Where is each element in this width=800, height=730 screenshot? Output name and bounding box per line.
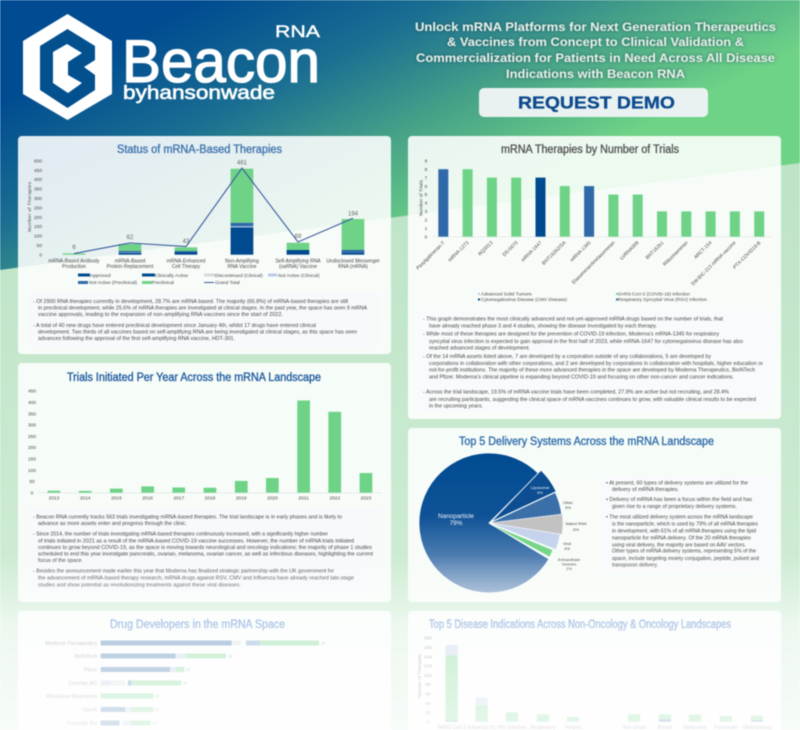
pie chart: delivery systems: Vesicles — [562, 562, 576, 566]
text block: status notes: vaccine approvals, leading to the expansion of non-amplifying RNA vaccines since the start of 2022. — [38, 312, 283, 318]
panel: status of mRNA-based therapies — [18, 136, 391, 354]
header tagline: Commercialization for Patients in Need Across All Disease — [416, 51, 775, 65]
stacked bar chart with total line: (saRNA) Vaccine — [279, 264, 317, 270]
legend: status chart: Clinically Active — [155, 273, 188, 279]
request demo button: REQUEST DEMO — [518, 92, 675, 112]
bar chart: therapies by trials: 5 — [425, 192, 428, 198]
bar chart: therapies by trials: 9 — [425, 158, 428, 164]
stacked bar chart: disease indications: 0 — [427, 719, 430, 725]
stacked bar chart with total line: 0 — [39, 252, 42, 258]
bar chart: therapies by trials: ARCT-154 — [693, 240, 714, 261]
heading: therapies by trials: mRNA Therapies by Number of Trials — [501, 144, 679, 156]
bar chart: therapies by trials: PTX-COVID19-B — [732, 240, 762, 271]
text block: therapies notes: - While most of these therapies are designed for the prevention of COVID-19 infection, Moderna’s mRNA-1345 for respiratory — [423, 332, 719, 338]
stacked bar chart: drug developers: Sanofi — [82, 708, 97, 714]
bar chart: trials per year: 2018 — [205, 496, 216, 502]
stacked bar chart with total line: 43 — [183, 239, 190, 245]
legend: status chart: Preclinical — [152, 280, 174, 286]
stacked bar chart: disease indications: 160 — [424, 645, 432, 651]
text block: therapies notes: - This graph demonstrates the most clinically advanced and not-yet-approved mRNA drugs based on the number of trials, that — [423, 316, 724, 322]
legend: status chart: Grand Total — [215, 280, 240, 286]
text block: therapies notes: reached advanced stages of development. — [429, 346, 530, 352]
background: light diagonal lower area — [0, 163, 800, 730]
stacked bar chart with total line: 300 — [34, 196, 42, 202]
panel: trials initiated per year — [18, 363, 391, 602]
stacked bar chart with total line: Protein Replacement — [107, 264, 154, 270]
pie chart: delivery systems: Naked RNA — [565, 521, 587, 526]
bar chart: therapies by trials: LVRNA009 — [619, 240, 641, 261]
pie chart: delivery systems: 5% — [565, 505, 571, 510]
bar chart: trials per year: 0 — [31, 490, 34, 496]
bar chart: therapies by trials: mRNA-1345 — [569, 240, 593, 263]
pie chart: delivery systems: Nanoparticle — [438, 513, 474, 520]
bar chart: therapies by trials: 8 — [425, 167, 428, 173]
stacked bar chart with total line: 350 — [34, 187, 42, 193]
text block: delivery notes: • The most utilized delivery system across the mRNA landscape — [606, 515, 753, 521]
heading: disease indications: Top 5 Disease Indications Across Non-Oncology & Oncology Landscapes — [429, 619, 731, 631]
legend: indications — [478, 292, 707, 303]
stacked bar chart: disease indications: 40 — [425, 701, 431, 707]
bar chart: therapies by trials: BNT162b1 — [645, 240, 666, 261]
text block: trials notes: continues to grow beyond COVID-19, as the space is moving towards neurological and oncology indications; the majority of phase 1 studies — [38, 545, 372, 551]
text block: delivery notes: using viral delivery, the majority are based on AAV vectors. — [612, 543, 746, 549]
bar chart: trials per year: 2019 — [236, 496, 247, 502]
text block: therapies notes: have already reached phase 3 and 4 studies, showing the disease investigated by each therapy. — [429, 324, 657, 330]
bar chart: trials per year: 350 — [28, 411, 36, 417]
header tagline: & Vaccines from Concept to Clinical Validation & — [447, 35, 744, 49]
stacked bar chart: drug developers: 76 — [321, 642, 325, 646]
pie chart: delivery systems: 79% — [450, 520, 463, 527]
text block: delivery notes — [601, 475, 772, 573]
bar chart: therapies by trials: DS-5670 — [502, 240, 520, 258]
heading: delivery systems: Top 5 Delivery Systems Across the mRNA Landscape — [459, 436, 714, 448]
bar chart: trials per year: 2014 — [80, 496, 91, 502]
stacked bar chart with total line: RNA (mRNA) — [338, 264, 368, 270]
bar chart: trials per year: 400 — [28, 400, 36, 406]
heading: status: Status of mRNA-Based Therapies — [117, 144, 282, 156]
stacked bar chart with total line: Number of Therapies — [27, 181, 32, 232]
stacked bar chart with total line: 68 — [295, 234, 302, 240]
text block: trials notes: the advancement of mRNA-based therapy research, mRNA drugs against RSV, CMV and Influenza have already reached late-stage — [38, 576, 354, 582]
stacked bar chart: drug developers: 45 — [228, 654, 232, 658]
stacked bar chart with total line: mRNA-Based Antibody — [48, 258, 100, 264]
panel: drug developers — [18, 611, 391, 730]
bar chart: therapies by trials: Elasomeran/imelasomeran — [571, 240, 617, 286]
stacked bar chart with total line: Non-Amplifying — [225, 258, 259, 264]
text block: therapies notes: syncytial virus infection is expected to gain approval in the first half of 2023, while mRNA-1647 for cytomegalovirus disease has also — [429, 339, 743, 345]
pie chart: delivery systems: Liposomal — [531, 485, 549, 490]
bar chart: trials per year: 2021 — [298, 496, 309, 502]
logo: Beacon RNA by Hanson Wade — [23, 14, 321, 120]
text block: therapies notes: - Of the 14 mRNA assets listed above, 7 are developed by a corporation outside of any collaborations, 5 are developed by — [423, 354, 711, 360]
text block: trials notes: scheduled to end this year investigate pancreatic, ovarian, melanoma, ovarian cancer, as well as infectious diseases, highlighting the current — [38, 552, 374, 558]
bar chart: therapies by trials: Riltozinameran — [662, 240, 690, 267]
bar chart: trials per year: 250 — [28, 434, 36, 440]
text block: delivery notes: • Delivery of mRNA has been a focus within the field and has — [606, 497, 752, 503]
text block: trials notes: - Beacon RNA currently tracks 563 trials investigating mRNA-based therapies. The trial landscape is in early phases and is likely to — [33, 514, 342, 520]
bar chart: trials per year: 450 — [28, 389, 36, 395]
stacked bar chart with total line: 62 — [127, 235, 134, 241]
text block: trials notes: - Besides the announcement made earlier this year that Moderna has finalized strategic partnership with the UK government for — [33, 569, 334, 575]
stacked bar chart with total line: 50 — [37, 243, 42, 249]
panel: top 5 disease indications — [408, 611, 781, 730]
pie chart: delivery systems: Other — [563, 500, 574, 505]
pie chart: delivery systems — [419, 453, 587, 593]
stacked bar chart: drug developers — [45, 640, 325, 727]
stacked bar chart with total line: 100 — [34, 234, 42, 240]
text block: delivery notes: nanoparticle for mRNA delivery. Of the 20 mRNA therapies — [612, 535, 751, 541]
stacked bar chart: disease indications — [417, 636, 772, 730]
stacked bar chart with total line: 400 — [34, 177, 42, 183]
text block: therapies notes — [417, 310, 771, 413]
stacked bar chart with total line — [27, 158, 380, 270]
pie chart: delivery systems: Viral — [563, 541, 571, 546]
text block: trials notes: - Since 2014, the number of trials investigating mRNA-based therapies continuously increased, with a significantly higher number — [33, 532, 328, 538]
logo: Beacon RNA by Hanson Wade: Beacon — [122, 28, 320, 95]
bar chart: trials per year: 2023 — [361, 496, 372, 502]
bar chart: therapies by trials: 7 — [425, 175, 428, 181]
pie chart: delivery systems: 4% — [564, 546, 570, 551]
legend: status chart: Not Active (Clinical) — [278, 273, 320, 279]
stacked bar chart: disease indications: 20 — [425, 710, 431, 716]
stacked bar chart: disease indications: 180 — [424, 636, 432, 642]
text block: status notes: in preclinical development, while 25.6% of mRNA therapies are investigated at clinical stages. In the past year, the space has seen 9 mRNA — [38, 306, 368, 312]
bar chart: trials per year: 150 — [28, 456, 36, 462]
text block: trials notes: of trials initiated in 2021 as a result of the mRNA-based COVID-19 vaccine successes. However, the number of mRNA trials initiated — [38, 538, 354, 544]
bar chart: therapies by trials: Number of Trials — [418, 179, 424, 216]
bar chart: trials per year — [28, 389, 382, 502]
stacked bar chart: disease indications: Number of Therapies — [417, 653, 423, 698]
stacked bar chart with total line: Cell Therapy — [172, 264, 201, 270]
bar chart: therapies by trials: SW-BIC-213 mRNA vaccine — [690, 240, 738, 287]
stacked bar chart: drug developers: BioNTech — [75, 654, 97, 660]
legend: status chart: Not Active (Preclinical) — [89, 280, 137, 286]
legend: status chart: Discontinued (Clinical) — [215, 273, 263, 279]
stacked bar chart with total line: 194 — [348, 212, 359, 218]
stacked bar chart with total line: Self-Amplifying RNA — [275, 258, 321, 264]
pie chart: delivery systems: 5% — [573, 527, 579, 532]
legend: indications: Advanced Solid Tumors — [481, 292, 532, 298]
stacked bar chart: drug developers: 35 — [186, 668, 190, 672]
text block: therapies notes: not-for-profit institutions. The majority of these more advanced therapies in the space are developed by Moderna Therapeutics, BioNTech — [429, 368, 755, 374]
heading: drug developers: Drug Developers in the mRNA Space — [110, 619, 285, 631]
text block: delivery notes: • At present, 60 types of delivery systems are utilized for the — [606, 481, 748, 487]
stacked bar chart: drug developers: Pfizer — [84, 668, 97, 674]
text block: therapies notes: - Across the trial landscape, 19.5% of mRNA vaccine trials have been completed, 27.9% are active but not recruiting, and 28.4% — [423, 390, 729, 396]
text block: delivery notes: delivery of mRNA therapies. — [612, 487, 679, 493]
stacked bar chart: drug developers: 19 — [152, 722, 156, 726]
panel: mRNA therapies by number of trials — [408, 136, 781, 419]
text block: therapies notes: and Pfizer. Moderna’s clinical pipeline is expanding beyond COVID-19 and focusing on other non-cancer and cancer indications. — [429, 374, 734, 380]
bar chart: trials per year: 2017 — [173, 496, 184, 502]
stacked bar chart: drug developers: Translate Bio — [67, 721, 97, 727]
text block: trials notes — [27, 508, 381, 593]
stacked bar chart with total line: mRNA-Based — [115, 258, 145, 264]
stacked bar chart: disease indications: 80 — [425, 682, 431, 688]
pie chart: delivery systems: 6% — [537, 490, 543, 495]
stacked bar chart with total line: 200 — [34, 215, 42, 221]
text block: status notes: development. Two thirds of all vaccines based on self-amplifying RNA are being investigated at clinical stages, as this space has seen — [38, 330, 357, 336]
text block: status notes: advances following the approval of the first self-amplifying RNA vaccine, HDT-301. — [38, 336, 235, 342]
text block: delivery notes: in development, with 61% of all mRNA therapies using the lipid — [612, 529, 756, 535]
bar chart: trials per year: 200 — [28, 445, 36, 451]
legend: indications: SARS-CoV-2 (COVID-19) Infection — [618, 292, 690, 298]
stacked bar chart with total line: RNA Vaccine — [227, 264, 257, 270]
legend: indications: Respiratory Syncytial Virus (RSV) Infection — [618, 297, 707, 303]
text block: status notes: - A total of 40 new drugs have entered preclinical development since January 4th, whilst 17 drugs have entered clinical — [33, 323, 316, 329]
text block: status notes — [27, 292, 381, 347]
stacked bar chart with total line: 6 — [72, 245, 76, 251]
stacked bar chart: disease indications: 60 — [425, 692, 431, 698]
bar chart: trials per year: 100 — [28, 468, 36, 474]
stacked bar chart with total line: 500 — [34, 158, 42, 164]
text block: delivery notes: given rise to a range of proprietary delivery systems. — [612, 504, 737, 510]
bar chart: therapies by trials — [415, 158, 772, 287]
bar chart: trials per year: 50 — [29, 479, 35, 485]
bar chart: therapies by trials: 0 — [425, 234, 428, 240]
stacked bar chart: drug developers: 30 — [183, 682, 187, 686]
stacked bar chart: drug developers: WestGene Biopharma — [46, 694, 97, 700]
header tagline — [415, 20, 776, 81]
stacked bar chart: drug developers: Moderna Therapeutics — [45, 641, 97, 647]
pie chart: delivery systems: Extracellular — [558, 557, 581, 562]
legend: status chart — [78, 273, 320, 286]
stacked bar chart with total line: 250 — [34, 205, 42, 211]
stacked bar chart: drug developers: CureVac AG — [69, 681, 97, 687]
stacked bar chart: disease indications: 120 — [424, 664, 432, 670]
text block: therapies notes: corporations in collaboration with other corporations, and 2 are developed by corporations in collaboration with hospitals, higher education or — [429, 361, 763, 367]
stacked bar chart with total line: 150 — [34, 224, 42, 230]
stacked bar chart with total line: Undisclosed Messenger — [326, 258, 380, 264]
stacked bar chart: drug developers: 20 — [155, 708, 159, 712]
bar chart: therapies by trials: 1 — [425, 226, 428, 232]
panel: top 5 delivery systems — [408, 428, 781, 602]
heading: trials: Trials Initiated Per Year Across the mRNA Landscape — [67, 372, 321, 384]
text block: therapies notes: in the upcoming years. — [429, 404, 483, 410]
bar chart: therapies by trials: mRNA-1647 — [520, 240, 544, 263]
text block: status notes: - Of 2900 RNA therapies currently in development, 28.7% are mRNA based. The majority (65.8%) of mRNA-based therapies are still — [33, 299, 348, 305]
stacked bar chart with total line: 461 — [237, 160, 248, 166]
logo: Beacon RNA by Hanson Wade: byhansonwade — [123, 83, 275, 104]
bar chart: trials per year: 2013 — [49, 496, 60, 502]
bar chart: therapies by trials: 6 — [425, 184, 428, 190]
header tagline: Unlock mRNA Platforms for Next Generation Therapeutics — [415, 20, 776, 34]
legend: status chart: Approved — [90, 273, 111, 279]
legend: indications: Cytomegalovirus Disease (CMV Disease) — [481, 297, 567, 303]
stacked bar chart: disease indications: 140 — [424, 654, 432, 660]
stacked bar chart: disease indications: 100 — [424, 673, 432, 679]
bar chart: trials per year: 300 — [28, 423, 36, 429]
pie chart: delivery systems: 2% — [566, 566, 572, 571]
logo: Beacon RNA by Hanson Wade: RNA — [275, 22, 321, 41]
bottom white fade overlay — [0, 555, 800, 730]
text block: trials notes: studies and show potential as revolutionizing treatments against these viral diseases. — [38, 583, 241, 589]
bar chart: therapies by trials: BNT162b2/SA — [541, 240, 568, 267]
bar chart: therapies by trials: mRNA-1273 — [447, 240, 471, 263]
stacked bar chart: drug developers: 20 — [155, 694, 159, 698]
text block: delivery notes: Other types of mRNA delivery systems, representing 5% of the — [612, 549, 756, 555]
bar chart: therapies by trials: Pasylgalimeran-T — [415, 240, 446, 271]
bar chart: therapies by trials: 4 — [425, 201, 428, 207]
text block: trials notes: focus of the space. — [38, 558, 83, 564]
stacked bar chart with total line: 450 — [34, 168, 42, 174]
bar chart: trials per year: 2020 — [267, 496, 278, 502]
text block: delivery notes: transposon delivery. — [612, 563, 658, 569]
bar chart: trials per year: 2016 — [142, 496, 153, 502]
header tagline: Indications with Beacon RNA — [506, 67, 685, 81]
bar chart: therapies by trials: 3 — [425, 209, 428, 215]
bar chart: trials per year: 2015 — [111, 496, 122, 502]
bar chart: therapies by trials: RQ3013 — [477, 240, 495, 257]
stacked bar chart with total line: mRNA-Enhanced — [167, 258, 206, 264]
bar chart: trials per year: 2022 — [329, 496, 340, 502]
text block: therapies notes: are recruiting participants, suggesting the clinical space of mRNA vaccines continues to grow, with valuable clinical results to be expected — [429, 397, 756, 403]
text block: delivery notes: space, include targeting moiety conjugation, peptide, pulsed and — [612, 556, 759, 562]
stacked bar chart with total line: Production — [62, 264, 86, 270]
bar chart: therapies by trials: 2 — [425, 218, 428, 224]
text block: delivery notes: is the nanoparticle, which is used by 79% of all mRNA therapies — [612, 522, 758, 528]
request demo button — [479, 88, 708, 117]
text block: trials notes: advance as more assets enter and progress through the clinic. — [38, 521, 187, 527]
